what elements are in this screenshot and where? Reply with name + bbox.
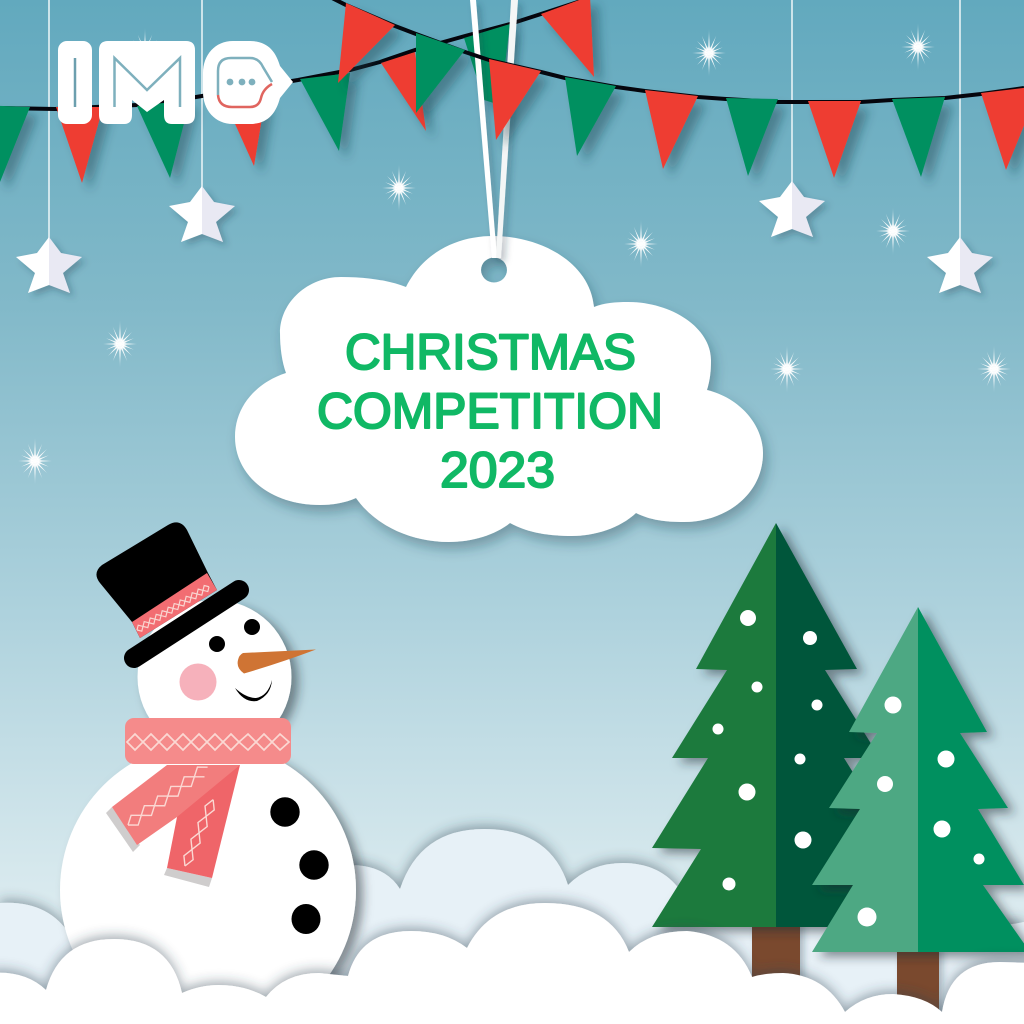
star 1 [16,237,82,293]
foliage [652,523,900,927]
sparkles [18,23,1011,485]
star 2 [169,186,235,242]
bunting front layer [330,0,1024,178]
flag green front [416,33,465,113]
title [317,324,663,498]
eyes [209,619,260,652]
flag green [565,77,616,156]
back snow clouds [0,829,1024,1024]
flag red main [489,59,541,140]
logo IMO: IMO [64,28,274,117]
cloud tag with title [235,236,763,542]
nose [238,650,316,674]
title: CHRISTMAS [345,324,636,380]
flag green left [137,100,190,178]
flag red back [381,52,426,131]
hanging stars [16,0,993,293]
ornaments [712,610,822,890]
flag red left [56,107,103,183]
trunk [752,920,800,982]
snowman [60,522,356,1024]
buttons [270,797,329,934]
flag red far right [981,86,1024,170]
body and head [60,600,356,1024]
bunting back layer [0,0,594,183]
flag green centre left [300,73,350,151]
ribbons of the tag [470,0,518,258]
hat [96,522,239,658]
scarf tails [106,762,240,887]
big tree [652,523,900,982]
cheek [180,664,216,700]
ornaments [858,696,984,926]
flag green [892,97,945,177]
flag red [645,90,698,169]
small tree [812,607,1024,1015]
flag green [726,98,778,176]
flag red upper left [338,3,395,83]
flag green back [464,24,510,105]
smile [235,680,272,701]
cloud shape [235,236,763,542]
trunk [897,945,939,1015]
front snow clouds [0,903,1024,1024]
foliage [812,607,1024,952]
star 4 [927,237,993,293]
title: COMPETITION [317,383,663,439]
flag red behind logo [227,100,265,166]
scarf neck [125,718,291,764]
flag red upper right [541,0,594,77]
star 3 [759,181,825,237]
title: 2023 [440,442,555,498]
flag green far left [0,105,30,182]
flag red [808,101,861,178]
scarf pattern [127,734,289,750]
